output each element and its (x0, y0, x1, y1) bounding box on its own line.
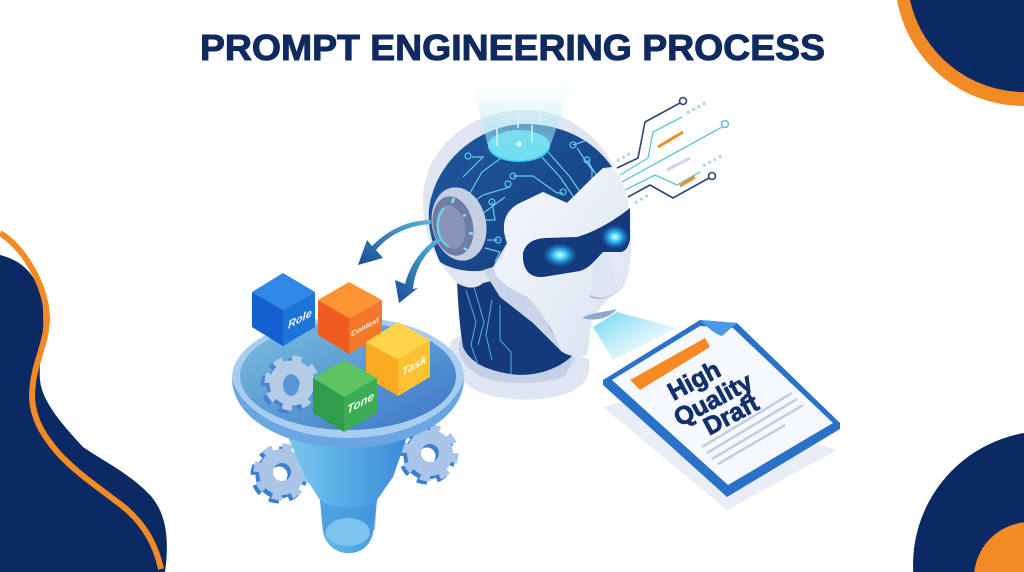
funnel (232, 317, 464, 553)
cube: Context (318, 282, 382, 354)
document heading (663, 356, 764, 441)
document (603, 320, 840, 497)
robot head (423, 85, 631, 400)
arrow: to funnel (395, 238, 441, 303)
visor (523, 208, 630, 277)
ear dial (425, 182, 493, 266)
funnel body (275, 425, 422, 553)
cube: Role: Role (288, 305, 312, 332)
neck (457, 268, 572, 375)
folded corner (700, 320, 737, 336)
document heading: Quality (669, 368, 757, 432)
decoration: left wave (0, 233, 167, 572)
decoration: bottom right corner (913, 433, 1024, 572)
eye right (601, 225, 629, 249)
cube: Task: Task (402, 351, 428, 379)
funnel rim (232, 317, 464, 439)
back shell (423, 110, 614, 288)
decoration: top right corner (897, 0, 1024, 106)
document heading: High (663, 356, 725, 406)
eye left (543, 243, 577, 267)
circuit lines right of head (617, 98, 728, 203)
gear inside funnel (264, 359, 316, 410)
light beam from mouth (593, 312, 677, 360)
cube: Tone (313, 360, 377, 432)
gear: right behind funnel (402, 428, 455, 481)
document text lines (702, 393, 803, 464)
cube: Context: Context (351, 315, 379, 339)
top light beam (472, 85, 572, 160)
arrow: to upper left (358, 220, 431, 265)
cube: Role (252, 273, 315, 346)
glowing crown (488, 130, 550, 162)
document sheet (603, 320, 840, 497)
skull circuitry (429, 124, 612, 271)
gear: left behind funnel (254, 447, 307, 500)
funnel inner (240, 322, 456, 430)
orange header bar (630, 338, 710, 390)
document heading: Draft (699, 389, 764, 441)
title: PROMPT ENGINEERING PROCESS (200, 27, 825, 68)
document shadow (603, 395, 837, 510)
cube: Task (366, 322, 430, 396)
head base ring (449, 336, 590, 400)
face (483, 168, 631, 356)
cube: Tone: Tone (347, 389, 374, 417)
